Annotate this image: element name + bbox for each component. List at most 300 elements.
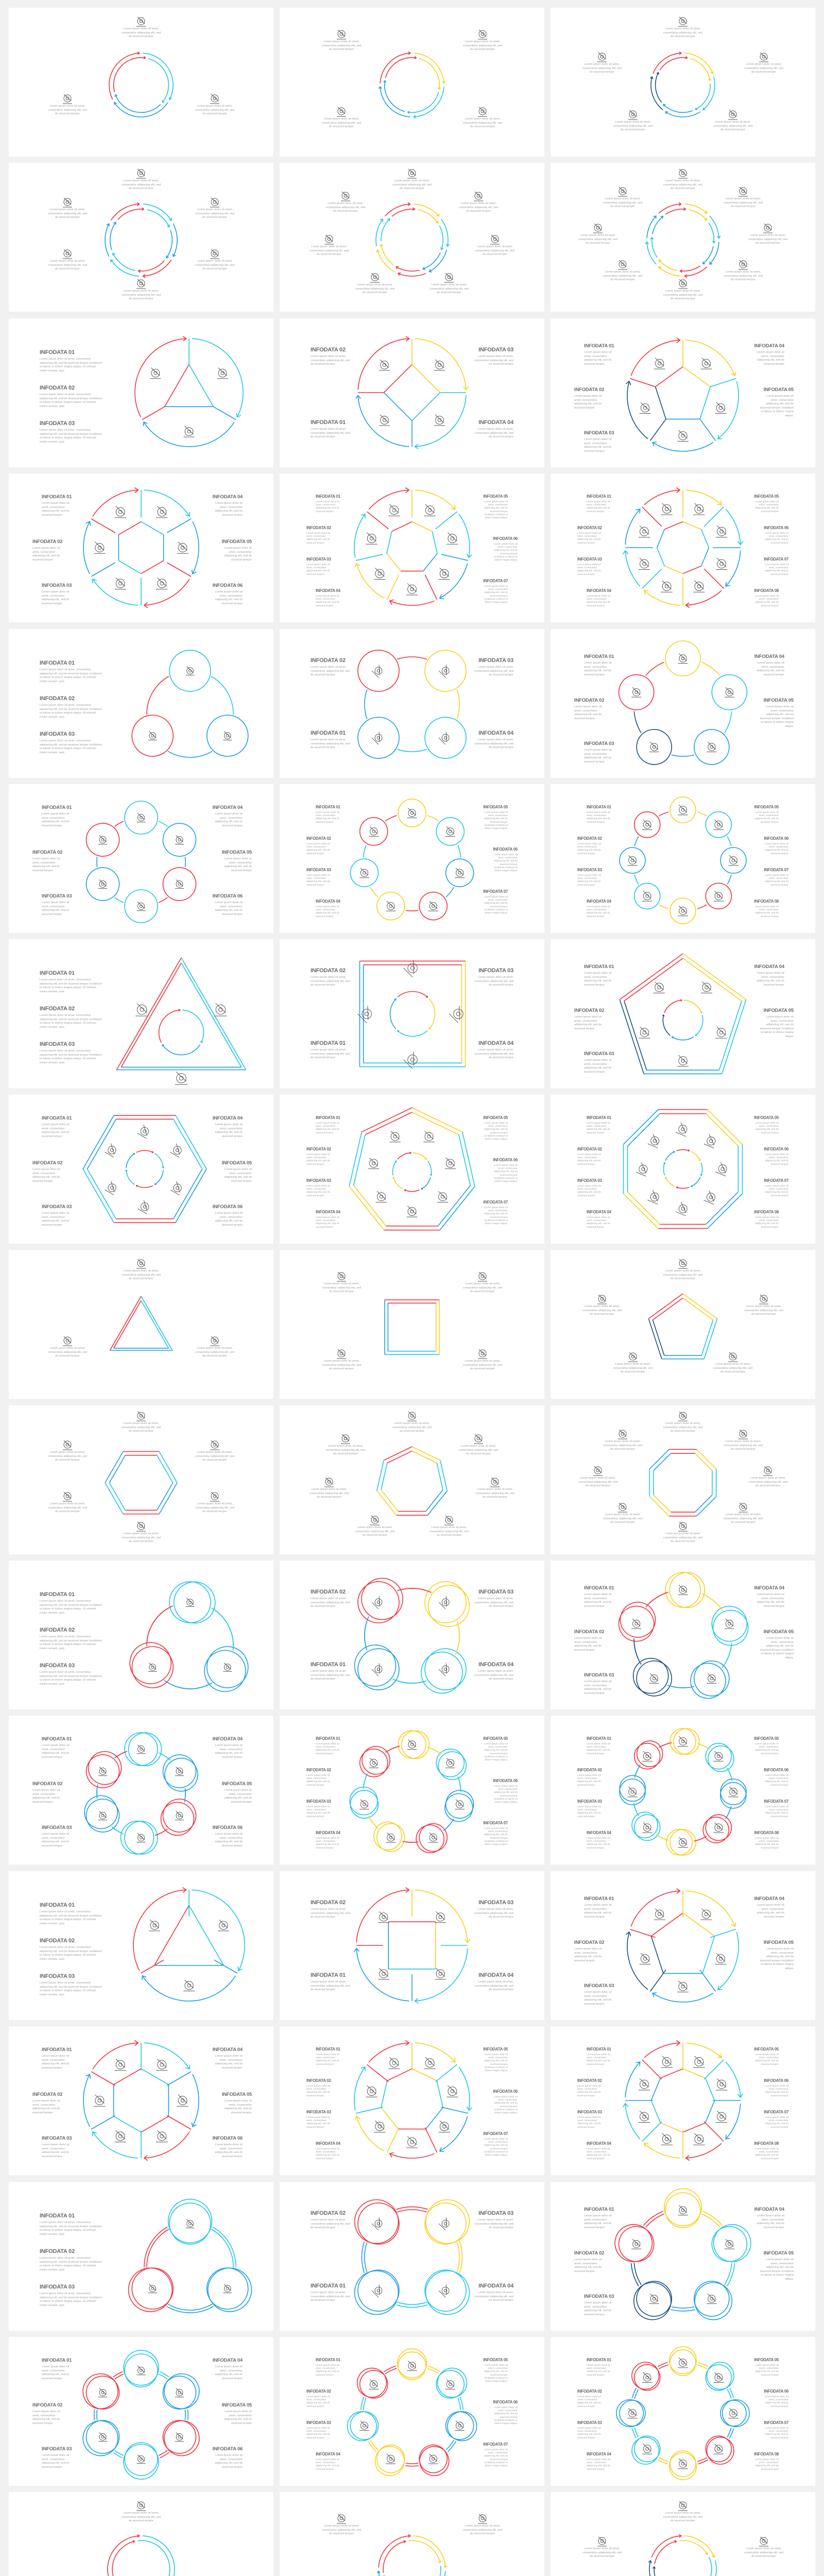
text block: Lorem ipsum dolor sit amet, consectetur adipiscing elit, sed do eiusmod tempor bbox=[42, 901, 69, 916]
text block bbox=[213, 583, 243, 605]
diagram: 8-part ring bbox=[593, 169, 772, 289]
text block bbox=[751, 2452, 779, 2471]
diagram: heptagon with circle bbox=[280, 1095, 544, 1244]
text block bbox=[750, 964, 784, 987]
text block: INFODATA 02 bbox=[32, 2402, 62, 2408]
text block: INFODATA 06 bbox=[493, 536, 518, 541]
text block: Lorem ipsum dolor sit amet, consectetur adipiscing elit, sed do eiusmod tempor incididunt ut labore et dolore magna aliqua. bbox=[484, 1207, 508, 1225]
text block: Lorem ipsum dolor sit amet, consectetur adipiscing elit, sed do eiusmod tempor bbox=[48, 1502, 87, 1513]
text block: INFODATA 04 bbox=[587, 1831, 611, 1835]
text block: INFODATA 01 bbox=[42, 2358, 72, 2363]
text block: Lorem ipsum dolor sit amet, consectetur adipiscing elit, sed do eiusmod tempor bbox=[724, 270, 763, 281]
diagram: small pentagon arrows bbox=[551, 1250, 815, 1399]
text block bbox=[480, 1200, 508, 1226]
text block bbox=[32, 1160, 66, 1183]
text block bbox=[577, 1768, 605, 1787]
text block: Lorem ipsum dolor sit amet, consectetur adipiscing elit, sed do eiusmod tempor bbox=[32, 2099, 60, 2114]
text block bbox=[42, 583, 72, 605]
text block: Lorem ipsum dolor sit amet, consectetur adipiscing elit, sed do eiusmod tempor incididunt ut labore et dolore magna aliqua. Ut enimad minim veniam, quis bbox=[40, 1049, 101, 1064]
text block: Lorem ipsum dolor sit amet, consectetur adipiscing elit, sed do eiusmod tempor bbox=[587, 2459, 610, 2471]
text block bbox=[751, 1115, 779, 1135]
text block: INFODATA 06 bbox=[493, 2089, 518, 2094]
text block: INFODATA 04 bbox=[213, 1115, 243, 1121]
text block: Lorem ipsum dolor sit amet, consectetur adipiscing elit, sed do eiusmod tempor bbox=[713, 121, 752, 131]
text block: Lorem ipsum dolor sit amet, consectetur adipiscing elit, sed do eiusmod tempor bbox=[724, 1440, 763, 1451]
text block: Lorem ipsum dolor sit amet, consectetur adipiscing elit, sed do eiusmod tempor bbox=[744, 2547, 783, 2558]
diagram: 5-part ring bbox=[597, 16, 768, 120]
text block: Lorem ipsum dolor sit amet, consectetur adipiscing elit, sed do eiusmod tempor bbox=[311, 1980, 350, 1991]
text block: Lorem ipsum dolor sit amet, consectetur adipiscing elit, sed do eiusmod tempor bbox=[663, 1422, 702, 1433]
panel: row 8 col 1 bbox=[9, 1095, 273, 1244]
text block: Lorem ipsum dolor sit amet, consectetur adipiscing elit, sed do eiusmod tempor bbox=[316, 811, 339, 824]
text block: INFODATA 06 bbox=[764, 2389, 788, 2394]
text block bbox=[587, 2141, 614, 2161]
text block: Lorem ipsum dolor sit amet, consectetur adipiscing elit, sed do eiusmod tempor bbox=[587, 595, 610, 607]
text block bbox=[480, 805, 508, 831]
text block: Lorem ipsum dolor sit amet, consectetur adipiscing elit, sed do eiusmod tempor bbox=[765, 2085, 788, 2097]
text block: Lorem ipsum dolor sit amet, consectetur adipiscing elit, sed do eiusmod tempor bbox=[574, 395, 602, 410]
text block: INFODATA 04 bbox=[213, 2047, 243, 2053]
text block: Lorem ipsum dolor sit amet, consectetur adipiscing elit, sed do eiusmod tempor bbox=[42, 2143, 69, 2158]
text block: Lorem ipsum dolor sit amet, consectetur adipiscing elit, sed do eiusmod tempor bbox=[311, 666, 350, 676]
panel: row 16 col 3 bbox=[551, 2337, 815, 2486]
text block: INFODATA 05 bbox=[754, 2358, 779, 2362]
panel: row 13 col 1 bbox=[9, 1871, 273, 2020]
text block: Lorem ipsum dolor sit amet, consectetur adipiscing elit, sed do eiusmod tempor bbox=[587, 811, 610, 824]
text block bbox=[480, 2047, 508, 2073]
text block: INFODATA 03 bbox=[40, 2284, 75, 2290]
text block: INFODATA 05 bbox=[483, 805, 508, 809]
text block bbox=[577, 526, 605, 545]
text block: Lorem ipsum dolor sit amet, consectetur adipiscing elit, sed do eiusmod tempor bbox=[430, 1526, 469, 1537]
text block bbox=[40, 731, 102, 755]
diagram: triangle with circle bbox=[9, 939, 273, 1088]
text block: Lorem ipsum dolor sit amet, consectetur adipiscing elit, sed do eiusmod tempor bbox=[326, 202, 365, 213]
text block: Lorem ipsum dolor sit amet, consectetur adipiscing elit, sed do eiusmod tempor bbox=[474, 2291, 513, 2302]
text block bbox=[316, 1736, 344, 1756]
text block: Lorem ipsum dolor sit amet, consectetur adipiscing elit, sed do eiusmod tempor bbox=[755, 2148, 779, 2160]
text block: INFODATA 02 bbox=[32, 1781, 62, 1787]
text block: Lorem ipsum dolor sit amet, consectetur adipiscing elit, sed do eiusmod tempor bbox=[306, 1185, 330, 1197]
text block bbox=[40, 970, 102, 994]
text block: INFODATA 03 bbox=[40, 1041, 75, 1047]
text block: INFODATA 02 bbox=[311, 968, 346, 974]
text block: Lorem ipsum dolor sit amet, consectetur adipiscing elit, sed do eiusmod tempor bbox=[755, 595, 779, 607]
diagram: small triangle arrows bbox=[9, 1250, 273, 1399]
text block: INFODATA 01 bbox=[587, 2047, 611, 2052]
panel: row 13 col 3 bbox=[551, 1871, 815, 2020]
text block: Lorem ipsum dolor sit amet, consectetur adipiscing elit, sed do eiusmod tempor bbox=[474, 1670, 513, 1681]
text block bbox=[42, 2047, 76, 2070]
diagram: pentagon with circle bbox=[551, 939, 815, 1088]
text block: INFODATA 08 bbox=[754, 1210, 779, 1214]
text block: Lorem ipsum dolor sit amet, consectetur adipiscing elit, sed do eiusmod tempor bbox=[577, 1806, 601, 1818]
text block: Lorem ipsum dolor sit amet, consectetur adipiscing elit, sed do eiusmod tempor bbox=[48, 1451, 87, 1462]
text block: Lorem ipsum dolor sit amet, consectetur adipiscing elit, sed do eiusmod tempor bbox=[577, 564, 601, 576]
text block: INFODATA 06 bbox=[764, 1768, 788, 1772]
panel: row 6 col 2 bbox=[280, 784, 544, 933]
text block: Lorem ipsum dolor sit amet, consectetur adipiscing elit, sed do eiusmod tempor incididunt ut labore et dolore magna aliqua. bbox=[484, 2054, 508, 2072]
text block: Lorem ipsum dolor sit amet, consectetur adipiscing elit, sed do eiusmod tempor bbox=[322, 2524, 361, 2535]
text block: Lorem ipsum dolor sit amet, consectetur adipiscing elit, sed do eiusmod tempor bbox=[577, 1185, 601, 1197]
text block: Lorem ipsum dolor sit amet, consectetur adipiscing elit, sed do eiusmod tempor bbox=[122, 179, 161, 190]
text block bbox=[490, 2089, 518, 2115]
text block bbox=[42, 494, 72, 517]
text block: Lorem ipsum dolor sit amet, consectetur adipiscing elit, sed do eiusmod tempor bbox=[755, 811, 779, 824]
text block bbox=[306, 868, 334, 887]
text block bbox=[306, 2420, 334, 2440]
text block: Lorem ipsum dolor sit amet, consectetur adipiscing elit, sed do eiusmod tempor bbox=[195, 260, 234, 270]
diagram: small square arrows bbox=[280, 1250, 544, 1399]
text block bbox=[316, 2047, 344, 2066]
text block: Lorem ipsum dolor sit amet, consectetur adipiscing elit, sed do eiusmod tempor bbox=[225, 1168, 252, 1183]
diagram: 4 double circles bbox=[280, 2182, 544, 2331]
text block: Lorem ipsum dolor sit amet, consectetur adipiscing elit, sed do eiusmod tempor bbox=[577, 2427, 601, 2439]
text block: Lorem ipsum dolor sit amet, consectetur adipiscing elit, sed do eiusmod tempor incididunt ut labore et dolore magna aliqua. Ut enimad minim veniam, quis bbox=[40, 1635, 101, 1650]
text block: INFODATA 03 bbox=[42, 1204, 72, 1210]
text block bbox=[316, 1210, 344, 1229]
text block: Lorem ipsum dolor sit amet, consectetur adipiscing elit, sed do eiusmod tempor bbox=[574, 2258, 602, 2273]
text block: INFODATA 01 bbox=[316, 2047, 340, 2052]
text block: Lorem ipsum dolor sit amet, consectetur adipiscing elit, sed do eiusmod tempor incididunt ut labore et dolore magna aliqua. bbox=[494, 1785, 518, 1804]
text block: Lorem ipsum dolor sit amet, consectetur adipiscing elit, sed do eiusmod tempor bbox=[463, 117, 502, 128]
text block bbox=[32, 1781, 66, 1804]
text block: Lorem ipsum dolor sit amet, consectetur adipiscing elit, sed do eiusmod tempor bbox=[755, 1216, 779, 1229]
text block bbox=[218, 2402, 252, 2426]
text block: INFODATA 03 bbox=[42, 893, 72, 899]
text block: Lorem ipsum dolor sit amet, consectetur adipiscing elit, sed do eiusmod tempor bbox=[306, 874, 330, 887]
text block bbox=[311, 657, 351, 677]
text block bbox=[209, 893, 243, 917]
text block: INFODATA 02 bbox=[311, 657, 346, 664]
text block: Lorem ipsum dolor sit amet, consectetur adipiscing elit, sed do eiusmod tempor bbox=[32, 857, 60, 872]
text block: INFODATA 05 bbox=[483, 1115, 508, 1120]
text block: INFODATA 06 bbox=[213, 583, 243, 588]
text block: Lorem ipsum dolor sit amet, consectetur adipiscing elit, sed do eiusmod tempor bbox=[42, 1833, 69, 1848]
text block: Lorem ipsum dolor sit amet, consectetur adipiscing elit, sed do eiusmod tempor bbox=[587, 501, 610, 513]
text block bbox=[761, 526, 788, 545]
diagram: 5 double circles bbox=[551, 2182, 815, 2331]
text block bbox=[316, 1115, 344, 1135]
text block bbox=[209, 2136, 243, 2159]
text block: Lorem ipsum dolor sit amet, consectetur adipiscing elit, sed do eiusmod tempor bbox=[663, 27, 702, 38]
text block bbox=[209, 1115, 243, 1139]
text block: Lorem ipsum dolor sit amet, consectetur adipiscing elit, sed do eiusmod tempor bbox=[584, 662, 612, 676]
text block: Lorem ipsum dolor sit amet, consectetur adipiscing elit, sed do eiusmod tempor bbox=[577, 2085, 601, 2097]
text block: INFODATA 05 bbox=[483, 1736, 508, 1741]
text block: INFODATA 05 bbox=[222, 2092, 252, 2097]
text block: Lorem ipsum dolor sit amet, consectetur adipiscing elit, sed do eiusmod tempor bbox=[474, 666, 513, 676]
text block bbox=[480, 1821, 508, 1846]
text block bbox=[587, 899, 614, 919]
text block bbox=[209, 805, 243, 828]
text block: Lorem ipsum dolor sit amet, consectetur adipiscing elit, sed do eiusmod tempor bbox=[587, 1122, 610, 1134]
text block: Lorem ipsum dolor sit amet, consectetur adipiscing elit, sed do eiusmod tempor incididunt ut labore et dolore magna aliqua. Ut enimad minim veniam, quis bbox=[40, 739, 101, 754]
text block: Lorem ipsum dolor sit amet, consectetur adipiscing elit, sed do eiusmod tempor bbox=[613, 1363, 653, 1374]
diagram: 5 linked circles bbox=[551, 1561, 815, 1709]
text block: Lorem ipsum dolor sit amet, consectetur adipiscing elit, sed do eiusmod tempor bbox=[578, 234, 617, 245]
text block bbox=[474, 419, 514, 438]
text block: INFODATA 06 bbox=[493, 847, 518, 852]
text block bbox=[751, 899, 779, 919]
text block: INFODATA 02 bbox=[311, 347, 346, 353]
text block: INFODATA 02 bbox=[311, 1900, 346, 1906]
text block: Lorem ipsum dolor sit amet, consectetur adipiscing elit, sed do eiusmod tempor bbox=[757, 1904, 784, 1919]
text block: Lorem ipsum dolor sit amet, consectetur adipiscing elit, sed do eiusmod tempor bbox=[195, 1347, 234, 1358]
text block: Lorem ipsum dolor sit amet, consectetur adipiscing elit, sed do eiusmod tempor bbox=[32, 2410, 60, 2425]
text block bbox=[587, 805, 614, 824]
panel: row 7 col 2 bbox=[280, 939, 544, 1088]
diagram: 7 circles bbox=[280, 784, 544, 933]
text block bbox=[218, 1781, 252, 1804]
text block bbox=[316, 588, 340, 607]
panel: row 5 col 1 bbox=[9, 629, 273, 778]
diagram: ring with pentagon bbox=[625, 337, 739, 452]
text block: Lorem ipsum dolor sit amet, consectetur adipiscing elit, sed do eiusmod tempor bbox=[584, 351, 612, 366]
diagram: segmented circle with triangle bbox=[9, 1871, 273, 2020]
text block: INFODATA 05 bbox=[764, 1940, 794, 1945]
diagram: 3 linked circles bbox=[9, 1561, 273, 1709]
text block: Lorem ipsum dolor sit amet, consectetur adipiscing elit, sed do eiusmod tempor bbox=[322, 40, 361, 51]
text block: Lorem ipsum dolor sit amet, consectetur adipiscing elit, sed do eiusmod tempor bbox=[42, 2454, 69, 2469]
text block: INFODATA 04 bbox=[316, 899, 340, 904]
text block: INFODATA 02 bbox=[577, 2389, 602, 2394]
panel: row 10 col 3 bbox=[551, 1405, 815, 1554]
text block: INFODATA 02 bbox=[306, 2078, 331, 2083]
text block: INFODATA 06 bbox=[764, 1147, 788, 1151]
text block: INFODATA 02 bbox=[574, 1629, 604, 1635]
text block: INFODATA 02 bbox=[40, 1627, 75, 1633]
text block bbox=[40, 1627, 102, 1651]
text block: INFODATA 04 bbox=[754, 1585, 784, 1591]
text block: Lorem ipsum dolor sit amet, consectetur adipiscing elit, sed do eiusmod tempor bbox=[474, 1597, 513, 1608]
diagram: 6 double circles bbox=[9, 2337, 273, 2486]
text block bbox=[490, 2400, 518, 2426]
text block bbox=[584, 430, 614, 453]
diagram: 8 circles bbox=[551, 784, 815, 933]
text block: Lorem ipsum dolor sit amet, consectetur adipiscing elit, sed do eiusmod tempor bbox=[584, 972, 612, 987]
text block: INFODATA 04 bbox=[754, 1896, 784, 1902]
diagram: 7 double circles bbox=[280, 2337, 544, 2486]
text block: Lorem ipsum dolor sit amet, consectetur adipiscing elit, sed do eiusmod tempor incididunt ut labore et dolore magna aliqua. bbox=[484, 585, 508, 604]
text block: Lorem ipsum dolor sit amet, consectetur adipiscing elit, sed do eiusmod tempor bbox=[724, 197, 763, 208]
text block: INFODATA 01 bbox=[40, 1591, 75, 1598]
text block bbox=[316, 2141, 344, 2161]
text block: INFODATA 02 bbox=[40, 385, 75, 391]
text block: INFODATA 01 bbox=[42, 494, 72, 500]
text block: INFODATA 05 bbox=[222, 1160, 252, 1166]
text block bbox=[587, 2358, 614, 2377]
diagram: 6 circles bbox=[9, 784, 273, 933]
text block: Lorem ipsum dolor sit amet, consectetur adipiscing elit, sed do eiusmod tempor bbox=[577, 2396, 601, 2408]
text block: Lorem ipsum dolor sit amet, consectetur adipiscing elit, sed do eiusmod tempor bbox=[306, 532, 330, 545]
text block bbox=[42, 893, 76, 917]
text block: INFODATA 03 bbox=[478, 1900, 513, 1906]
panel: row 7 col 3 bbox=[551, 939, 815, 1088]
diagram: 3 arrow arcs bbox=[9, 2492, 273, 2576]
text block: INFODATA 06 bbox=[493, 2400, 518, 2404]
panel: row 10 col 1 bbox=[9, 1405, 273, 1554]
text block: INFODATA 01 bbox=[584, 964, 614, 970]
text block: Lorem ipsum dolor sit amet, consectetur adipiscing elit, sed do eiusmod tempor bbox=[582, 63, 622, 74]
text block: Lorem ipsum dolor sit amet, consectetur adipiscing elit, sed do eiusmod tempor bbox=[765, 2116, 788, 2129]
text block bbox=[577, 2389, 605, 2409]
text block: INFODATA 06 bbox=[213, 1204, 243, 1210]
text block bbox=[306, 2389, 334, 2409]
text block: Lorem ipsum dolor sit amet, consectetur adipiscing elit, sed do eiusmod tempor bbox=[48, 260, 87, 270]
text block bbox=[584, 741, 618, 764]
text block: INFODATA 04 bbox=[587, 2141, 611, 2146]
text block: Lorem ipsum dolor sit amet, consectetur adipiscing elit, sed do eiusmod tempor bbox=[42, 590, 69, 605]
panel: row 17 col 1 bbox=[9, 2492, 273, 2576]
text block: Lorem ipsum dolor sit amet, consectetur adipiscing elit, sed do eiusmod tempor bbox=[765, 1806, 788, 1818]
text block: Lorem ipsum dolor sit amet, consectetur adipiscing elit, sed do eiusmod tempor bbox=[584, 1680, 612, 1695]
text block bbox=[311, 968, 351, 988]
text block bbox=[574, 1940, 608, 1963]
text block: Lorem ipsum dolor sit amet, consectetur adipiscing elit, sed do eiusmod tempor bbox=[48, 105, 87, 115]
text block bbox=[311, 2210, 351, 2230]
text block: INFODATA 04 bbox=[213, 1736, 243, 1742]
text block: INFODATA 03 bbox=[577, 1178, 602, 1183]
text block: Lorem ipsum dolor sit amet, consectetur adipiscing elit, sed do eiusmod tempor bbox=[306, 1806, 330, 1818]
text block bbox=[761, 836, 788, 856]
diagram: small octagon arrows bbox=[551, 1405, 815, 1554]
text block: Lorem ipsum dolor sit amet, consectetur adipiscing elit, sed do eiusmod tempor bbox=[724, 1513, 763, 1524]
text block: INFODATA 07 bbox=[764, 2420, 788, 2425]
text block: INFODATA 02 bbox=[306, 526, 331, 530]
text block: INFODATA 05 bbox=[754, 1115, 779, 1120]
diagram: 4 circles bbox=[280, 629, 544, 778]
text block: Lorem ipsum dolor sit amet, consectetur adipiscing elit, sed do eiusmod tempor bbox=[463, 40, 502, 51]
text block bbox=[584, 1585, 618, 1608]
text block: Lorem ipsum dolor sit amet, consectetur adipiscing elit, sed do eiusmod tempor bbox=[430, 283, 469, 294]
text block bbox=[209, 1825, 243, 1848]
panel: row 15 col 1 bbox=[9, 2182, 273, 2331]
panel: row 4 col 1 bbox=[9, 473, 273, 622]
text block: Lorem ipsum dolor sit amet, consectetur adipiscing elit, sed do eiusmod tempor bbox=[306, 843, 330, 855]
text block: Lorem ipsum dolor sit amet, consectetur adipiscing elit, sed do eiusmod tempor bbox=[311, 2291, 350, 2302]
text block: Lorem ipsum dolor sit amet, consectetur adipiscing elit, sed do eiusmod tempor bbox=[306, 564, 330, 576]
text block: INFODATA 03 bbox=[40, 1663, 75, 1669]
panel: row 6 col 1 bbox=[9, 784, 273, 933]
text block: Lorem ipsum dolor sit amet, consectetur adipiscing elit, sed do eiusmod tempor bbox=[311, 1670, 350, 1681]
text block bbox=[40, 1938, 102, 1961]
text block: Lorem ipsum dolor sit amet, consectetur adipiscing elit, sed do eiusmod tempor bbox=[765, 1774, 788, 1787]
text block: Lorem ipsum dolor sit amet, consectetur adipiscing elit, sed do eiusmod tempor bbox=[355, 1526, 394, 1537]
text block bbox=[40, 1591, 102, 1615]
text block: Lorem ipsum dolor sit amet, consectetur adipiscing elit, sed do eiusmod tempor bbox=[311, 2218, 350, 2229]
text block: INFODATA 03 bbox=[306, 1178, 331, 1183]
text block: INFODATA 06 bbox=[493, 1778, 518, 1783]
panel: row 11 col 2 bbox=[280, 1561, 544, 1709]
text block: INFODATA 07 bbox=[483, 1200, 508, 1205]
text block: Lorem ipsum dolor sit amet, consectetur adipiscing elit, sed do eiusmod tempor bbox=[474, 976, 513, 987]
text block: Lorem ipsum dolor sit amet, consectetur adipiscing elit, sed do eiusmod tempor bbox=[311, 738, 350, 749]
text block bbox=[483, 494, 508, 519]
text block: Lorem ipsum dolor sit amet, consectetur adipiscing elit, sed do eiusmod tempor bbox=[316, 1216, 339, 1229]
text block: Lorem ipsum dolor sit amet, consectetur adipiscing elit, sed do eiusmod tempor bbox=[755, 2364, 779, 2377]
text block: Lorem ipsum dolor sit amet, consectetur adipiscing elit, sed do eiusmod tempor incididunt ut labore et dolore magna aliqua. bbox=[494, 854, 518, 872]
text block: Lorem ipsum dolor sit amet, consectetur adipiscing elit, sed do eiusmod tempor bbox=[757, 2214, 784, 2229]
text block: Lorem ipsum dolor sit amet, consectetur adipiscing elit, sed do eiusmod tempor bbox=[42, 812, 69, 827]
text block: INFODATA 03 bbox=[306, 868, 331, 872]
text block: Lorem ipsum dolor sit amet, consectetur adipiscing elit, sed do eiusmod tempor bbox=[215, 1833, 243, 1848]
text block: Lorem ipsum dolor sit amet, consectetur adipiscing elit, sed do eiusmod tempor bbox=[311, 1048, 350, 1059]
diagram: 5 arrow arcs bbox=[551, 2492, 815, 2576]
text block: Lorem ipsum dolor sit amet, consectetur adipiscing elit, sed do eiusmod tempor bbox=[474, 2218, 513, 2229]
text block bbox=[584, 1051, 618, 1074]
text block: INFODATA 04 bbox=[587, 2452, 611, 2456]
text block bbox=[480, 1115, 508, 1141]
text block: INFODATA 01 bbox=[40, 970, 75, 976]
text block: Lorem ipsum dolor sit amet, consectetur adipiscing elit, sed do eiusmod tempor bbox=[587, 1837, 610, 1850]
text block bbox=[751, 588, 779, 608]
text block bbox=[218, 2092, 252, 2115]
text block bbox=[473, 2210, 513, 2230]
text block: Lorem ipsum dolor sit amet, consectetur adipiscing elit, sed do eiusmod tempor bbox=[582, 2547, 622, 2558]
text block bbox=[750, 1585, 784, 1608]
text block: Lorem ipsum dolor sit amet, consectetur adipiscing elit, sed do eiusmod tempor incididunt ut labore et dolore magna aliqua. Ut enimad minim veniam, quis bbox=[40, 393, 101, 408]
text block: INFODATA 07 bbox=[764, 557, 788, 562]
text block bbox=[584, 1672, 618, 1696]
text block bbox=[490, 1778, 518, 1804]
text block bbox=[42, 805, 76, 828]
text block bbox=[311, 1900, 351, 1920]
text block: INFODATA 05 bbox=[222, 1781, 252, 1787]
panel: row 5 col 2 bbox=[280, 629, 544, 778]
text block bbox=[42, 2446, 76, 2469]
text block: Lorem ipsum dolor sit amet, consectetur adipiscing elit, sed do eiusmod tempor bbox=[306, 1154, 330, 1166]
text block: INFODATA 02 bbox=[40, 1938, 75, 1944]
text block: Lorem ipsum dolor sit amet, consectetur adipiscing elit, sed do eiusmod tempor bbox=[755, 2054, 779, 2066]
text block: INFODATA 03 bbox=[577, 557, 602, 562]
text block: Lorem ipsum dolor sit amet, consectetur adipiscing elit, sed do eiusmod tempor incididunt ut labore et dolore magna aliqua. Ut enimad minim veniam, quis bbox=[40, 1946, 101, 1961]
text block bbox=[218, 1160, 252, 1183]
text block: Lorem ipsum dolor sit amet, consectetur adipiscing elit, sed do eiusmod tempor bbox=[474, 355, 513, 366]
text block: INFODATA 04 bbox=[478, 1972, 513, 1978]
text block: INFODATA 02 bbox=[574, 1008, 604, 1013]
text block bbox=[577, 2078, 605, 2098]
panel: row 14 col 1 bbox=[9, 2026, 273, 2175]
text block: Lorem ipsum dolor sit amet, consectetur adipiscing elit, sed do eiusmod tempor bbox=[577, 2116, 601, 2129]
diagram: segmented circle 8 bbox=[551, 2026, 815, 2175]
text block: Lorem ipsum dolor sit amet, consectetur adipiscing elit, sed do eiusmod tempor incididunt ut labore et dolore magna aliqua. bbox=[760, 1637, 794, 1659]
text block bbox=[751, 2358, 779, 2377]
text block bbox=[480, 1736, 508, 1762]
text block: INFODATA 05 bbox=[764, 387, 794, 393]
text block bbox=[222, 539, 252, 562]
text block bbox=[761, 1147, 788, 1166]
panel: row 15 col 2 bbox=[280, 2182, 544, 2331]
text block bbox=[584, 654, 618, 677]
text block: INFODATA 04 bbox=[213, 805, 243, 810]
text block: Lorem ipsum dolor sit amet, consectetur adipiscing elit, sed do eiusmod tempor bbox=[316, 2148, 339, 2160]
text block: INFODATA 01 bbox=[42, 2047, 72, 2053]
text block: Lorem ipsum dolor sit amet, consectetur adipiscing elit, sed do eiusmod tempor bbox=[587, 1216, 610, 1229]
text block: Lorem ipsum dolor sit amet, consectetur adipiscing elit, sed do eiusmod tempor bbox=[463, 1282, 502, 1293]
text block: Lorem ipsum dolor sit amet, consectetur adipiscing elit, sed do eiusmod tempor bbox=[215, 2143, 243, 2158]
panel: row 15 col 3 bbox=[551, 2182, 815, 2331]
text block: Lorem ipsum dolor sit amet, consectetur adipiscing elit, sed do eiusmod tempor bbox=[474, 1048, 513, 1059]
text block bbox=[584, 1983, 618, 2006]
text block: INFODATA 07 bbox=[483, 579, 508, 583]
text block: Lorem ipsum dolor sit amet, consectetur adipiscing elit, sed do eiusmod tempor bbox=[311, 976, 350, 987]
text block bbox=[40, 1663, 102, 1686]
text block: INFODATA 04 bbox=[587, 588, 611, 593]
text block: INFODATA 05 bbox=[483, 2358, 508, 2362]
text block: INFODATA 03 bbox=[584, 741, 614, 747]
diagram: ring with square bbox=[355, 336, 469, 449]
